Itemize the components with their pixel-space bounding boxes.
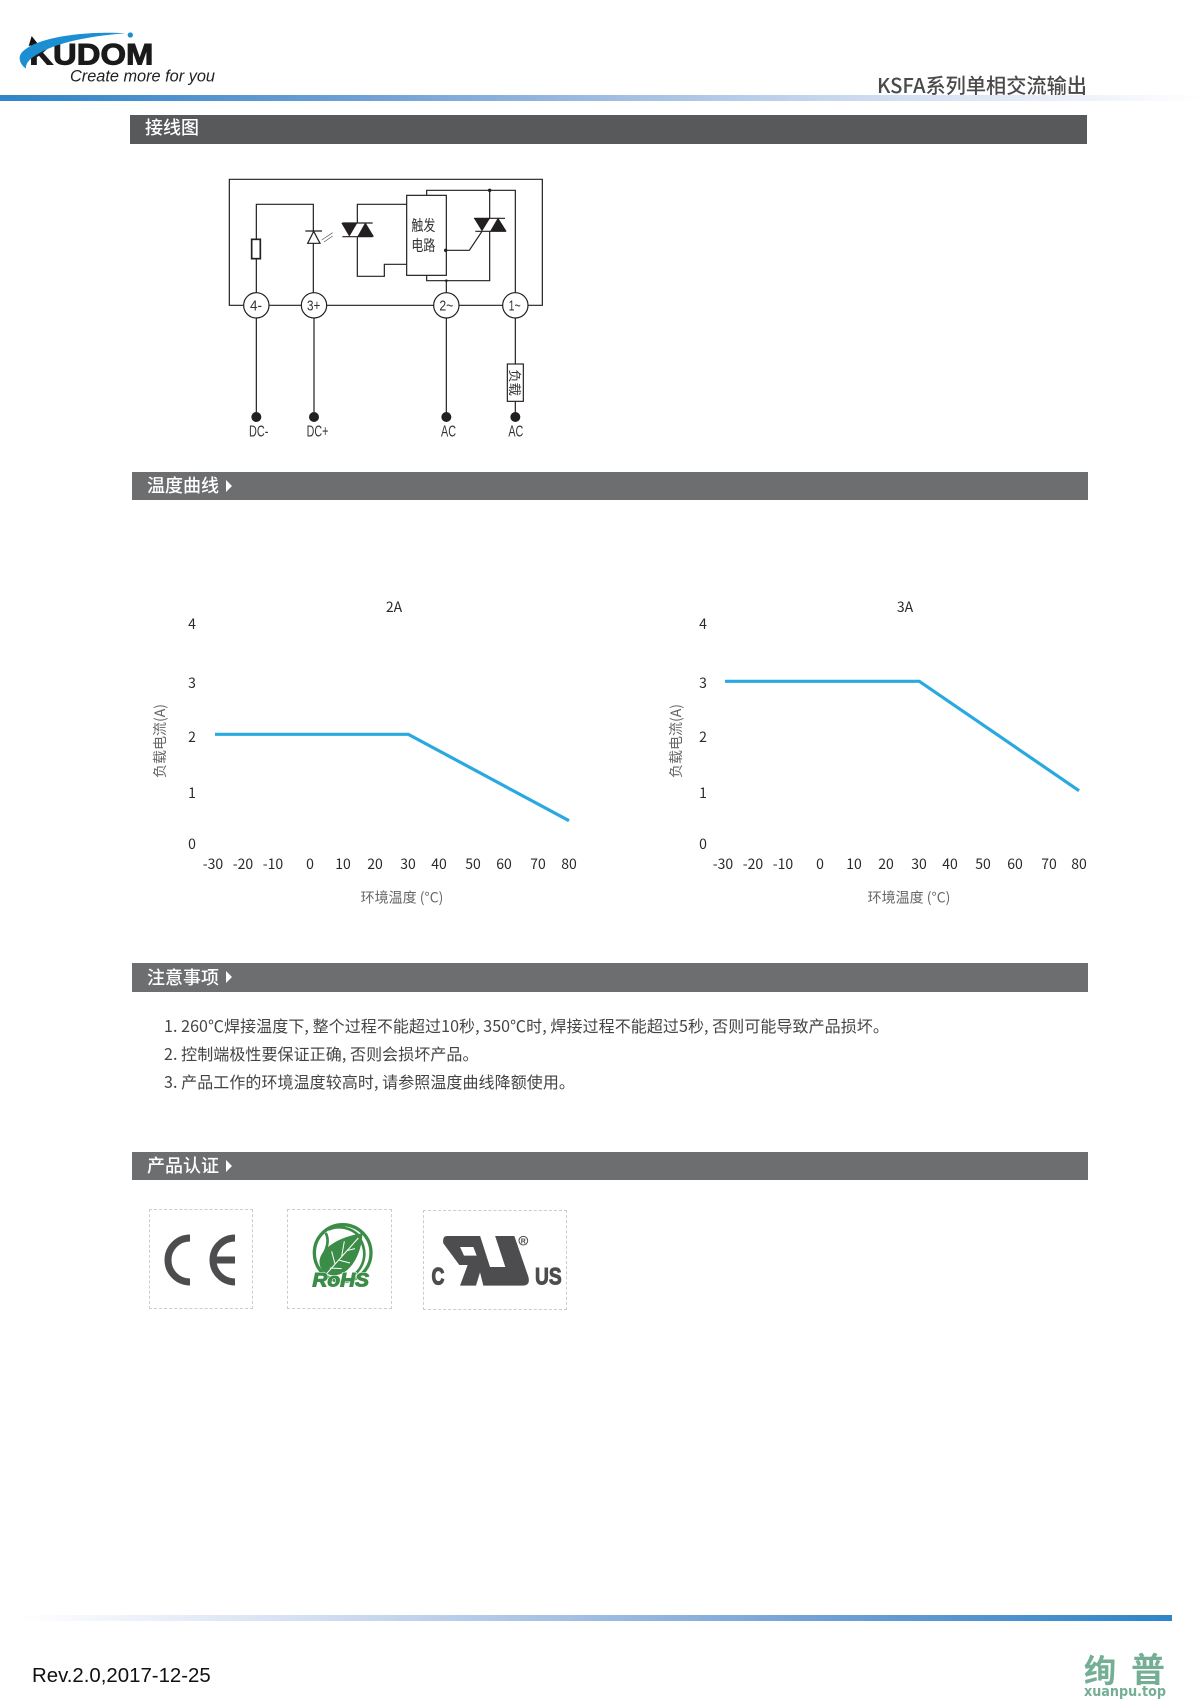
watermark <box>1084 1643 1166 1700</box>
wiring diagram <box>228 178 543 441</box>
cert: CE <box>149 1209 253 1309</box>
text: 20 <box>878 854 894 874</box>
labels: 2~ <box>439 298 453 314</box>
heading: temperature curves <box>132 472 1088 500</box>
text: 1 <box>188 783 196 803</box>
top gradient rule <box>0 95 1203 101</box>
text: 环境温度 (°C) <box>868 888 950 908</box>
text: 负载电流(A) <box>150 704 170 778</box>
text: 3A <box>897 597 914 617</box>
notes list <box>164 1013 889 1093</box>
text: 60 <box>496 854 512 874</box>
chart: 3A derating <box>666 597 1087 908</box>
load box: 负载 <box>506 369 525 396</box>
text: 0 <box>816 854 824 874</box>
text: -10 <box>263 854 283 874</box>
text: 70 <box>1041 854 1057 874</box>
text: -20 <box>233 854 253 874</box>
labels: AC <box>441 424 456 441</box>
watermark: xuanpu.top <box>1084 1684 1166 1700</box>
text: 3 <box>699 673 707 693</box>
text: 20 <box>367 854 383 874</box>
text: 0 <box>188 834 196 854</box>
optotriac <box>341 204 407 276</box>
text: 40 <box>942 854 958 874</box>
logo: KUDOM: KUDOM <box>29 39 153 72</box>
labels: 3+ <box>307 298 320 314</box>
text: 4 <box>188 614 196 634</box>
logo: KUDOM <box>20 32 215 86</box>
text: 0 <box>699 834 707 854</box>
text: 4 <box>699 614 707 634</box>
watermark: 绚 <box>1084 1646 1116 1692</box>
cert: cULus <box>423 1210 567 1310</box>
text: 1 <box>699 783 707 803</box>
text: 30 <box>911 854 927 874</box>
text: 30 <box>400 854 416 874</box>
trigger circuit box: 触发 <box>411 213 436 235</box>
cert: RoHS <box>287 1209 392 1309</box>
heading: certification: 产品认证 <box>147 1152 219 1178</box>
labels: 1~ <box>509 298 521 314</box>
text: 80 <box>561 854 577 874</box>
text: 60 <box>1007 854 1023 874</box>
terminals <box>244 293 528 318</box>
revision text: Rev.2.0,2017-12-25 <box>32 1665 211 1687</box>
labels: DC+ <box>307 424 328 441</box>
heading: wiring diagram <box>130 115 1087 144</box>
cert: RoHS: RoHS <box>312 1270 369 1291</box>
leads <box>256 318 515 417</box>
heading: notes <box>132 963 1088 992</box>
text: 2 <box>699 727 707 747</box>
logo: KUDOM: Create more for you <box>70 68 215 86</box>
trigger circuit box <box>407 195 446 275</box>
trigger circuit box: 电路 <box>411 233 436 255</box>
text: 50 <box>465 854 481 874</box>
text: 50 <box>975 854 991 874</box>
labels: AC <box>508 424 523 441</box>
text: 负载电流(A) <box>666 704 686 778</box>
text: 1. 260℃焊接温度下, 整个过程不能超过10秒, 350℃时, 焊接过程不能超过5秒, 否则可能导致产品损坏。 <box>164 1013 889 1037</box>
cert: cULus: R <box>521 1238 526 1245</box>
text: 环境温度 (°C) <box>361 888 443 908</box>
text: 80 <box>1071 854 1087 874</box>
text: 10 <box>335 854 351 874</box>
labels: 4- <box>250 298 262 314</box>
document title: KSFA系列单相交流输出 <box>877 70 1087 99</box>
text: 3. 产品工作的环境温度较高时, 请参照温度曲线降额使用。 <box>164 1069 575 1093</box>
text: 3 <box>188 673 196 693</box>
text: 70 <box>530 854 546 874</box>
labels <box>249 298 523 441</box>
cert: RoHS: RoHS <box>312 1270 369 1291</box>
cert: cULus: C <box>432 1263 444 1290</box>
heading: wiring diagram: 接线图 <box>145 114 199 140</box>
text: 2. 控制端极性要保证正确, 否则会损坏产品。 <box>164 1041 479 1065</box>
input circuit <box>252 204 333 293</box>
text: -30 <box>713 854 733 874</box>
watermark: 普 <box>1131 1643 1165 1692</box>
text: 10 <box>846 854 862 874</box>
text: 0 <box>306 854 314 874</box>
text: 2A <box>386 597 403 617</box>
heading: notes: 注意事项 <box>147 964 219 990</box>
text: 2 <box>188 727 196 747</box>
terminal dots <box>251 412 520 422</box>
heading: certification <box>132 1152 1088 1180</box>
heading: temperature curves: 温度曲线 <box>147 472 219 498</box>
cert: cULus: US <box>535 1263 562 1290</box>
labels: DC- <box>249 424 268 441</box>
text: -30 <box>203 854 223 874</box>
chart: 2A derating <box>150 597 577 908</box>
bottom gradient rule <box>20 1615 1172 1621</box>
text: -20 <box>743 854 763 874</box>
output triac <box>427 189 515 293</box>
text: 40 <box>431 854 447 874</box>
text: -10 <box>773 854 793 874</box>
